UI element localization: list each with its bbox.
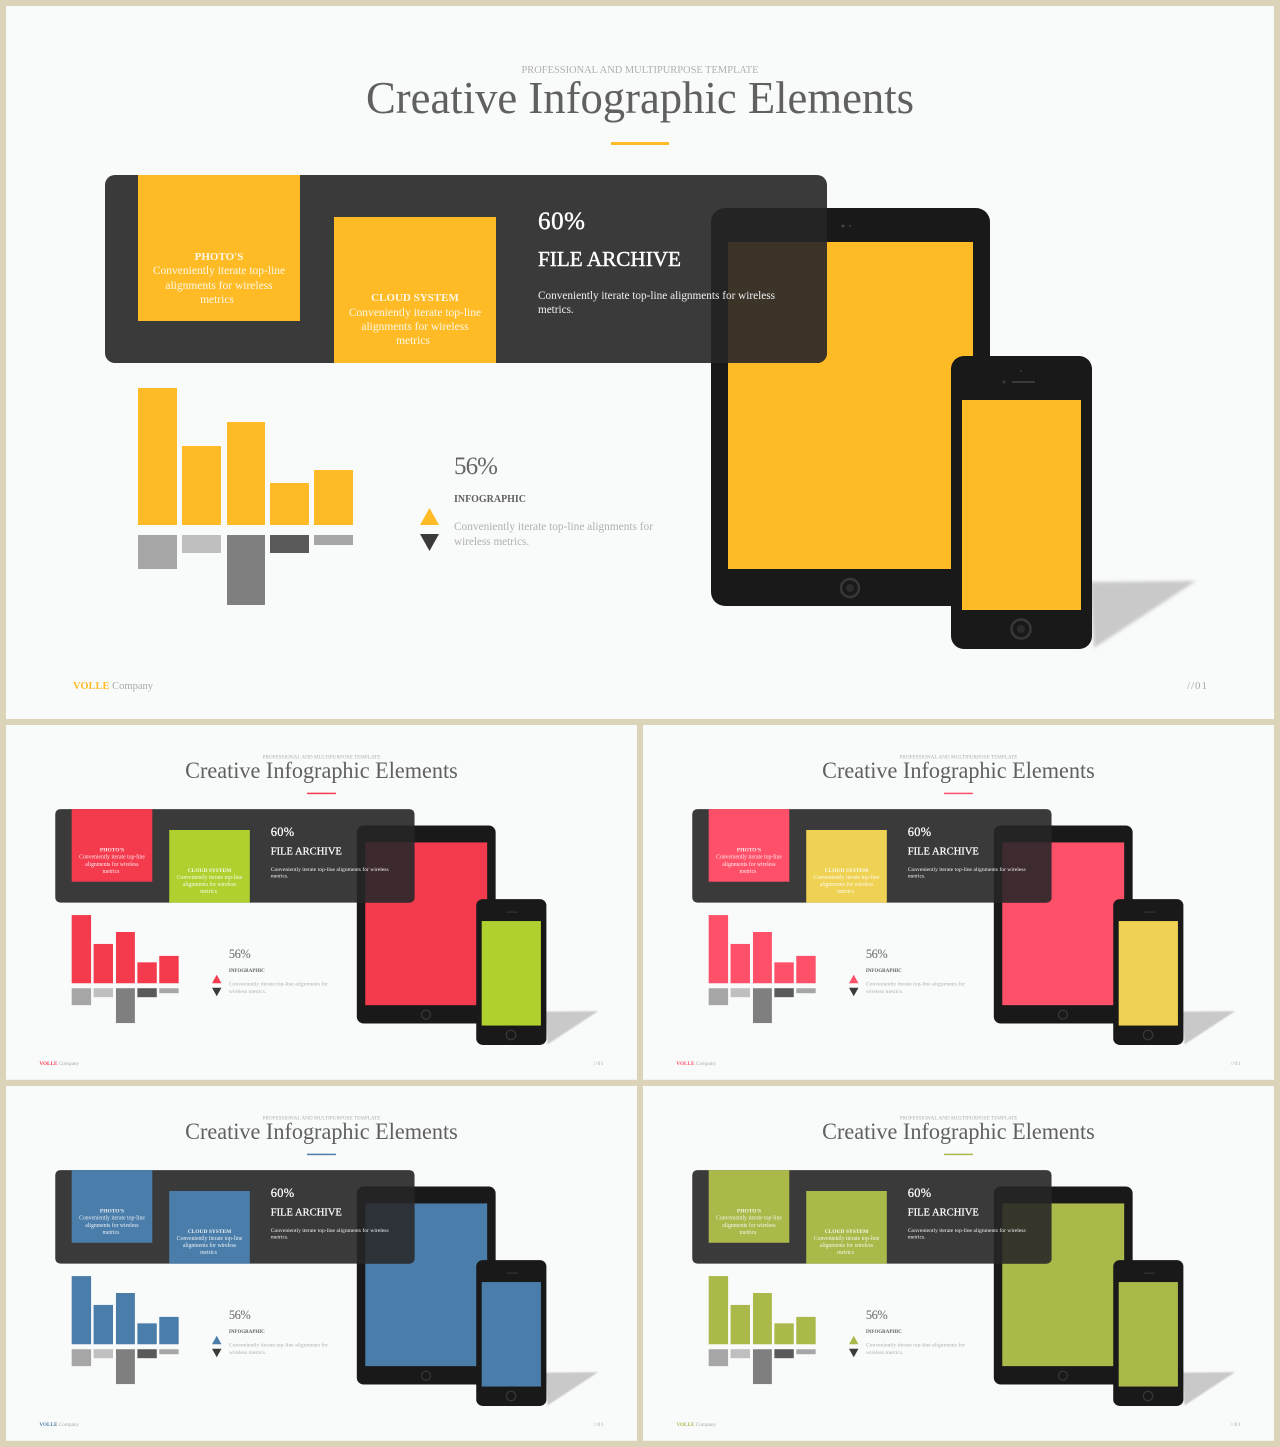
card: photos: PHOTO'S — [100, 847, 124, 853]
card: photos — [138, 175, 300, 321]
device shadow — [1182, 1011, 1235, 1044]
subtitle: PROFESSIONAL AND MULTIPURPOSE TEMPLATE — [522, 65, 758, 76]
bar chart — [709, 1276, 816, 1384]
card: cloud system: Conveniently iterate top-line — [349, 307, 481, 319]
title: Creative Infographic Elements — [185, 758, 458, 783]
dark banner — [55, 1170, 415, 1264]
bar chart — [138, 388, 353, 605]
dark banner — [55, 809, 415, 903]
tablet — [357, 826, 496, 1024]
footer brand: VOLLE Company — [676, 1061, 716, 1067]
phone — [1113, 899, 1183, 1045]
stat: infographic: Conveniently iterate top-line alignments for — [229, 981, 328, 988]
card: cloud system: CLOUD SYSTEM — [825, 1229, 868, 1235]
tablet — [994, 826, 1133, 1024]
stat: file archive — [271, 1186, 389, 1241]
stat: file archive: FILE ARCHIVE — [908, 846, 979, 857]
tablet — [711, 208, 990, 606]
card: cloud system: metrics — [200, 889, 218, 895]
stat: file archive: Conveniently iterate top-line alignments for wireless — [538, 290, 775, 302]
slide: blue — [6, 1086, 637, 1441]
card: cloud system: Conveniently iterate top-line — [177, 875, 243, 881]
slide: yellow main — [6, 6, 1274, 719]
stat: infographic — [866, 1308, 965, 1356]
stat: file archive: metrics. — [538, 304, 574, 316]
stat: infographic: Conveniently iterate top-line alignments for — [866, 981, 965, 988]
title accent line — [611, 142, 669, 145]
phone — [951, 356, 1092, 649]
device shadow — [545, 1011, 598, 1044]
dark banner — [692, 1170, 1052, 1264]
title accent line — [307, 1154, 336, 1155]
stat: file archive: 60% — [271, 825, 294, 839]
stat: infographic — [229, 1308, 328, 1356]
stat: infographic: wireless metrics. — [229, 989, 267, 995]
card: cloud system — [169, 830, 250, 903]
card: cloud system: CLOUD SYSTEM — [825, 868, 868, 874]
stat: file archive: FILE ARCHIVE — [271, 846, 342, 857]
card: photos: alignments for wireless — [722, 1222, 776, 1229]
stat: infographic: Conveniently iterate top-line alignments for — [866, 1342, 965, 1349]
stat: file archive: 60% — [908, 1186, 931, 1200]
device shadow — [545, 1372, 598, 1405]
card: photos: metrics — [740, 1230, 757, 1236]
card: cloud system: alignments for wireless — [361, 321, 469, 333]
page number: //01 — [1231, 1422, 1241, 1428]
slide: olive — [643, 1086, 1274, 1441]
stat: infographic: 56% — [866, 1308, 888, 1322]
stat: infographic: INFOGRAPHIC — [229, 1329, 265, 1335]
card: cloud system: alignments for wireless — [820, 1242, 874, 1249]
stat: file archive: FILE ARCHIVE — [538, 247, 681, 271]
card: photos: metrics — [103, 869, 120, 875]
bar chart — [709, 915, 816, 1023]
tablet — [994, 1187, 1133, 1385]
card: photos: metrics — [103, 1230, 120, 1236]
page number: //01 — [594, 1422, 604, 1428]
stat: file archive: 60% — [538, 208, 585, 235]
card: photos: alignments for wireless — [165, 280, 273, 292]
card: photos: metrics — [740, 869, 757, 875]
card: cloud system: alignments for wireless — [820, 881, 874, 888]
stat: file archive: metrics. — [271, 1235, 289, 1241]
card: cloud system — [334, 217, 496, 363]
card: cloud system: Conveniently iterate top-line — [814, 1236, 880, 1242]
card: photos: Conveniently iterate top-line — [716, 1215, 782, 1221]
stat: infographic: wireless metrics. — [454, 536, 529, 548]
card: photos — [72, 1170, 152, 1243]
subtitle: PROFESSIONAL AND MULTIPURPOSE TEMPLATE — [263, 1116, 380, 1121]
page number: //01 — [1231, 1061, 1241, 1067]
card: photos: alignments for wireless — [85, 861, 139, 868]
stat: infographic: Conveniently iterate top-line alignments for — [454, 521, 653, 533]
card: photos: PHOTO'S — [100, 1208, 124, 1214]
stat: infographic: INFOGRAPHIC — [229, 968, 265, 974]
icon: up and down arrows — [849, 1336, 858, 1357]
card: photos: Conveniently iterate top-line — [79, 854, 145, 860]
title accent line — [944, 793, 973, 794]
card: photos — [709, 809, 789, 882]
stat: file archive: Conveniently iterate top-line alignments for wireless — [908, 866, 1026, 873]
stat: infographic: wireless metrics. — [229, 1350, 267, 1356]
stat: infographic — [229, 947, 328, 995]
footer brand: VOLLE Company — [676, 1422, 716, 1428]
card: cloud system: CLOUD SYSTEM — [188, 1229, 231, 1235]
card: cloud system: Conveniently iterate top-line — [814, 875, 880, 881]
card: photos — [709, 1170, 789, 1243]
card: cloud system: alignments for wireless — [183, 881, 237, 888]
stat: infographic: 56% — [454, 453, 498, 480]
stat: infographic: wireless metrics. — [866, 1350, 904, 1356]
card: photos: metrics — [200, 294, 234, 306]
stat: file archive: metrics. — [908, 1235, 926, 1241]
title accent line — [944, 1154, 973, 1155]
stat: file archive — [908, 1186, 1026, 1241]
dark banner — [105, 175, 827, 363]
stat: file archive: Conveniently iterate top-line alignments for wireless — [271, 866, 389, 873]
phone — [476, 1260, 546, 1406]
subtitle: PROFESSIONAL AND MULTIPURPOSE TEMPLATE — [900, 755, 1017, 760]
stat: infographic — [866, 947, 965, 995]
stat: infographic: INFOGRAPHIC — [866, 1329, 902, 1335]
stat: infographic: Conveniently iterate top-line alignments for — [229, 1342, 328, 1349]
title: Creative Infographic Elements — [822, 758, 1095, 783]
card: cloud system: alignments for wireless — [183, 1242, 237, 1249]
card: photos: Conveniently iterate top-line — [153, 265, 285, 277]
device shadow — [1090, 581, 1196, 648]
stat: file archive: FILE ARCHIVE — [271, 1207, 342, 1218]
footer brand: VOLLE Company — [73, 680, 153, 692]
stat: file archive: Conveniently iterate top-line alignments for wireless — [271, 1227, 389, 1234]
card: cloud system: metrics — [837, 1250, 855, 1256]
stat: infographic: 56% — [229, 947, 251, 961]
tablet — [357, 1187, 496, 1385]
title accent line — [307, 793, 336, 794]
card: cloud system — [806, 830, 887, 903]
footer brand: VOLLE Company — [39, 1061, 79, 1067]
title: Creative Infographic Elements — [185, 1119, 458, 1144]
device shadow — [1182, 1372, 1235, 1405]
stat: file archive: 60% — [271, 1186, 294, 1200]
phone — [1113, 1260, 1183, 1406]
slide: red and green — [6, 725, 637, 1080]
stat: file archive: metrics. — [271, 874, 289, 880]
icon: up and down arrows — [420, 508, 439, 551]
stat: infographic: 56% — [866, 947, 888, 961]
bar chart — [72, 1276, 179, 1384]
card: photos: PHOTO'S — [737, 1208, 761, 1214]
stat: file archive: 60% — [908, 825, 931, 839]
stat: file archive — [538, 208, 775, 316]
stat: infographic — [454, 453, 653, 548]
icon: up and down arrows — [849, 975, 858, 996]
stat: infographic: 56% — [229, 1308, 251, 1322]
stat: file archive: Conveniently iterate top-line alignments for wireless — [908, 1227, 1026, 1234]
card: cloud system: CLOUD SYSTEM — [371, 292, 459, 304]
stat: file archive: metrics. — [908, 874, 926, 880]
stat: file archive: FILE ARCHIVE — [908, 1207, 979, 1218]
card: photos — [72, 809, 152, 882]
card: cloud system — [169, 1191, 250, 1264]
stat: infographic: wireless metrics. — [866, 989, 904, 995]
bar chart — [72, 915, 179, 1023]
card: cloud system: CLOUD SYSTEM — [188, 868, 231, 874]
stat: infographic: INFOGRAPHIC — [454, 494, 526, 505]
card: photos: alignments for wireless — [85, 1222, 139, 1229]
page number: //01 — [1187, 680, 1207, 692]
footer brand: VOLLE Company — [39, 1422, 79, 1428]
card: photos: PHOTO'S — [737, 847, 761, 853]
stat: file archive — [908, 825, 1026, 880]
icon: up and down arrows — [212, 975, 221, 996]
card: cloud system: Conveniently iterate top-line — [177, 1236, 243, 1242]
card: photos: Conveniently iterate top-line — [716, 854, 782, 860]
stat: infographic: INFOGRAPHIC — [866, 968, 902, 974]
phone — [476, 899, 546, 1045]
title: Creative Infographic Elements — [366, 72, 914, 123]
page number: //01 — [594, 1061, 604, 1067]
stat: file archive — [271, 825, 389, 880]
slide: pink and yellow — [643, 725, 1274, 1080]
subtitle: PROFESSIONAL AND MULTIPURPOSE TEMPLATE — [900, 1116, 1017, 1121]
title: Creative Infographic Elements — [822, 1119, 1095, 1144]
subtitle: PROFESSIONAL AND MULTIPURPOSE TEMPLATE — [263, 755, 380, 760]
dark banner — [692, 809, 1052, 903]
card: cloud system: metrics — [200, 1250, 218, 1256]
card: photos: Conveniently iterate top-line — [79, 1215, 145, 1221]
icon: up and down arrows — [212, 1336, 221, 1357]
card: photos: alignments for wireless — [722, 861, 776, 868]
card: cloud system: metrics — [396, 335, 430, 347]
card: cloud system: metrics — [837, 889, 855, 895]
card: cloud system — [806, 1191, 887, 1264]
card: photos: PHOTO'S — [195, 251, 243, 263]
